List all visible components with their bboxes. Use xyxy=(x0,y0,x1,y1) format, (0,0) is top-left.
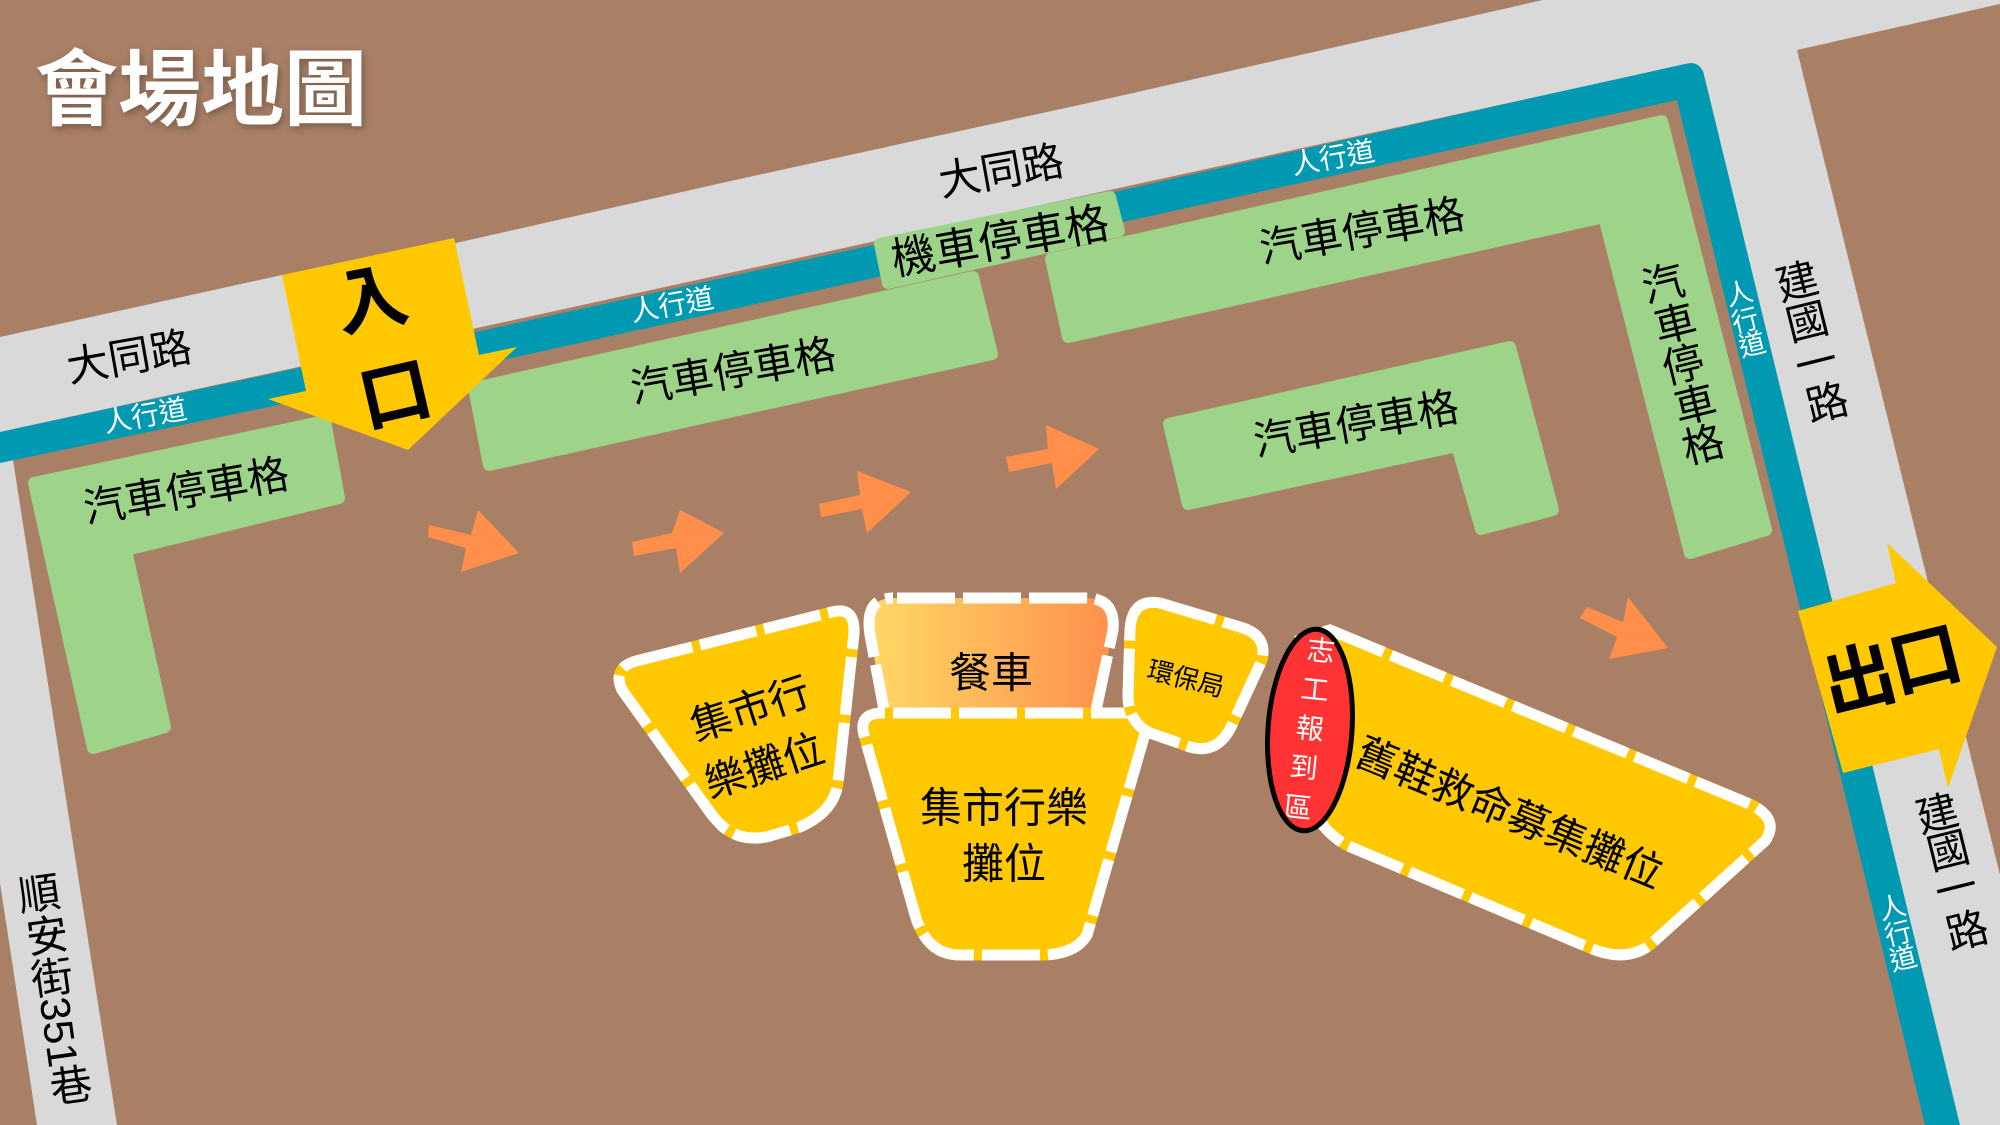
shoe collection label: 舊鞋救命募集攤位 xyxy=(1349,729,1670,897)
centre stall label: 攤位 xyxy=(962,841,1046,888)
road label 建國一路 upper: 國 xyxy=(1781,294,1833,350)
road label 順安街351巷 xyxy=(15,868,95,1112)
road label 建國一路 upper: 建 xyxy=(1771,254,1823,310)
sidewalk label right lower: 人 xyxy=(1876,890,1909,926)
exit label: 口 xyxy=(1881,613,1970,708)
road label 建國一路 lower: 一 xyxy=(1930,861,1982,917)
road label 建國一路 upper xyxy=(1771,254,1853,431)
parking: motorcycle xyxy=(880,197,1119,283)
title: 會場地圖 xyxy=(35,44,367,137)
sidewalk label right upper: 道 xyxy=(1736,327,1769,363)
sidewalk label right upper: 人 xyxy=(1723,276,1756,312)
road label 建國一路 upper: 一 xyxy=(1790,335,1842,391)
parking: top right L xyxy=(1051,121,1766,553)
parking: centre xyxy=(474,277,992,465)
entrance label: 入 xyxy=(329,254,414,347)
volunteer label: 志 xyxy=(1305,634,1336,668)
parking label vertical xyxy=(1637,256,1729,473)
volunteer check-in ellipse xyxy=(1261,626,1359,834)
direction arrow 1 xyxy=(428,510,519,572)
parking label vertical: 車 xyxy=(1649,296,1701,352)
sidewalk label 2: 人行道 xyxy=(628,282,716,327)
road label right: 大同路 xyxy=(935,137,1067,205)
exit arrow xyxy=(1798,543,1997,788)
centre stall label xyxy=(920,785,1088,888)
direction arrow 2 xyxy=(632,510,724,573)
left stall label: 樂攤位 xyxy=(699,725,830,807)
left stall label: 集市行 xyxy=(685,668,816,750)
parking label left: 汽車停車格 xyxy=(80,450,292,532)
volunteer label xyxy=(1282,634,1336,825)
sidewalk label right lower: 行 xyxy=(1882,916,1915,952)
sidewalk label right lower xyxy=(1876,890,1920,977)
direction arrow 5 xyxy=(1580,597,1668,659)
stall: environmental bureau xyxy=(1128,602,1263,749)
exit label xyxy=(1815,613,1970,728)
left stall label xyxy=(685,668,830,807)
volunteer label: 到 xyxy=(1288,751,1319,785)
parking: left L xyxy=(34,421,339,748)
exit label: 出 xyxy=(1815,633,1904,728)
stall: shoe collection xyxy=(1300,630,1770,955)
parking label vertical: 格 xyxy=(1677,417,1729,473)
volunteer label: 工 xyxy=(1299,673,1330,707)
entrance label: 口 xyxy=(352,348,440,443)
parking label centre: 汽車停車格 xyxy=(627,330,839,412)
road label 順安街351巷: 順 xyxy=(15,868,63,920)
volunteer label: 區 xyxy=(1282,791,1313,825)
sidewalk label right upper: 行 xyxy=(1729,303,1762,339)
road label 建國一路 lower: 路 xyxy=(1941,903,1993,959)
road: 順安街351巷 strip xyxy=(0,460,117,1125)
parking label top right: 汽車停車格 xyxy=(1256,190,1468,272)
stall: centre market xyxy=(863,713,1146,955)
direction arrow 3 xyxy=(819,471,911,533)
road label 建國一路 lower: 國 xyxy=(1922,823,1974,879)
road label 建國一路 upper: 路 xyxy=(1801,375,1853,431)
parking label vertical: 停 xyxy=(1657,337,1709,393)
entrance arrow xyxy=(268,238,517,450)
sidewalk label 1: 人行道 xyxy=(101,393,189,438)
road label 順安街351巷: 街 xyxy=(28,952,76,1004)
road label 建國一路 lower: 建 xyxy=(1911,786,1963,842)
sidewalk label right upper xyxy=(1723,276,1769,363)
stall: left market xyxy=(619,611,854,838)
sidewalk label right lower: 道 xyxy=(1887,941,1920,977)
centre stall label: 集市行樂 xyxy=(920,785,1088,832)
road label left: 大同路 xyxy=(63,323,195,391)
road label 順安街351巷: 351 xyxy=(31,994,87,1070)
food truck label: 餐車 xyxy=(949,650,1033,697)
parking: middle L xyxy=(1169,347,1553,529)
entrance label xyxy=(329,254,440,443)
volunteer label: 報 xyxy=(1294,712,1325,746)
road label 順安街351巷: 安 xyxy=(23,910,71,962)
stall: food truck xyxy=(869,598,1113,715)
road label 順安街351巷: 巷 xyxy=(47,1060,95,1112)
parking label middle: 汽車停車格 xyxy=(1250,383,1462,465)
parking label vertical: 車 xyxy=(1669,377,1721,433)
sidewalk label 3: 人行道 xyxy=(1289,135,1377,180)
motorcycle label: 機車停車格 xyxy=(888,199,1113,285)
road label 建國一路 lower xyxy=(1911,786,1993,959)
parking label vertical: 汽 xyxy=(1637,256,1689,312)
direction arrow 4 xyxy=(1006,425,1099,489)
environmental bureau label: 環保局 xyxy=(1144,655,1227,703)
